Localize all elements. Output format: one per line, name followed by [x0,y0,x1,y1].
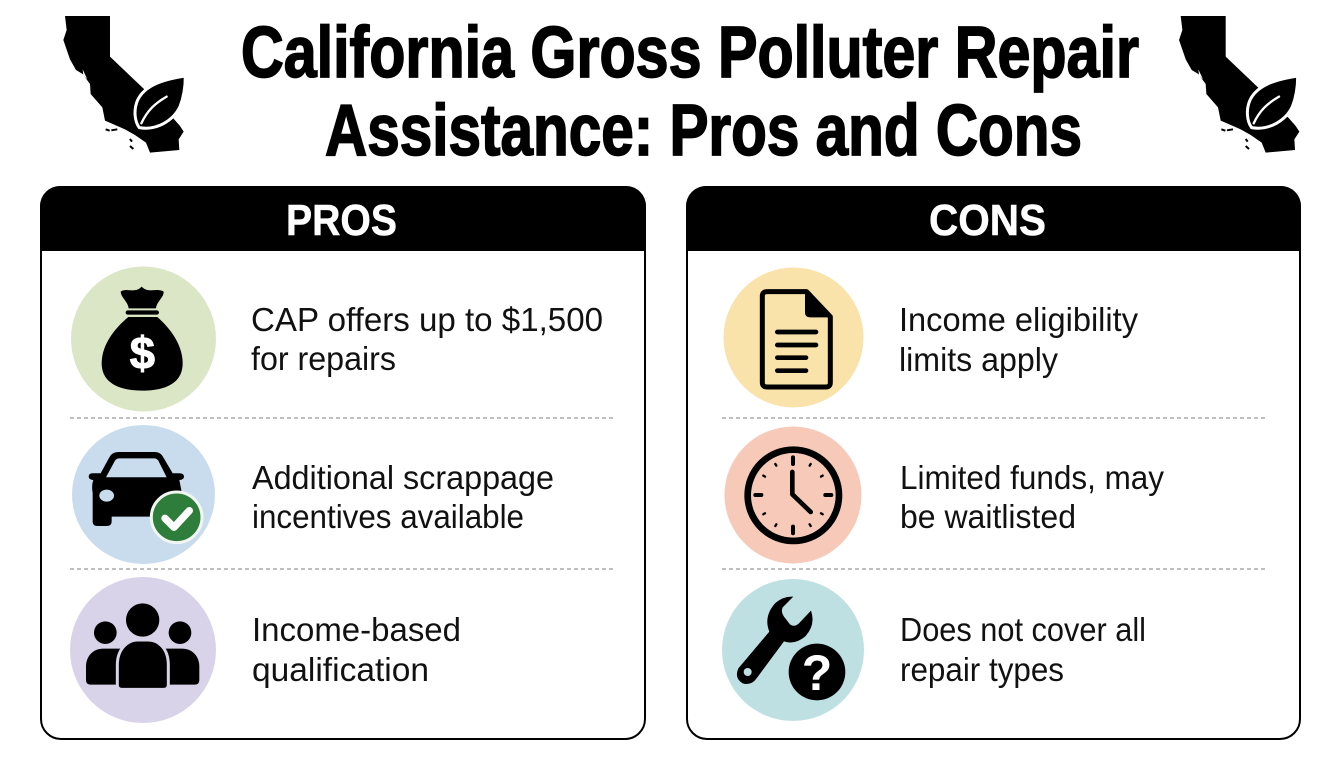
title: Assistance: Pros and Cons [325,91,1082,171]
text: scrappage [252,459,554,535]
icon: California map with leaf, left [63,16,185,153]
icon: document [724,268,864,408]
text: income-based [252,611,461,688]
text: limited funds [900,459,1164,535]
icon: wrench with question mark [722,579,864,721]
text: repair types: Does not cover all [900,611,1146,648]
text: income limits [899,301,1138,378]
text: income limits: Income eligibility [899,301,1138,338]
icon: money bag: $ [130,328,155,379]
icon: wrench with question mark: ? [802,645,832,701]
text: scrappage: incentives available [252,498,524,535]
pros header: PROS [286,196,397,245]
cons header: CONS [929,196,1046,245]
text: repair types [900,611,1146,688]
icon: clock [724,426,862,564]
text: limited funds: be waitlisted [900,498,1076,535]
icon: people group [70,577,216,723]
text: CAP offers: CAP offers up to $1,500 [251,301,603,338]
panel: cons [686,186,1301,739]
icon: California map with leaf, right [1179,16,1299,153]
icon: car with check [72,425,215,564]
text: CAP offers [251,301,603,377]
text: income-based: qualification [252,651,429,688]
cons header [686,186,1301,251]
title [241,13,1139,171]
pros header [40,186,646,251]
panel: pros [40,186,646,739]
icon: money bag [71,266,216,412]
text: repair types: repair types [900,651,1064,688]
text: income-based: Income-based [252,611,461,648]
text: limited funds: Limited funds, may [900,459,1164,496]
text: scrappage: Additional scrappage [252,459,554,496]
text: CAP offers: for repairs [251,340,396,377]
title: California Gross Polluter Repair [241,13,1139,93]
text: income limits: limits apply [899,341,1058,378]
